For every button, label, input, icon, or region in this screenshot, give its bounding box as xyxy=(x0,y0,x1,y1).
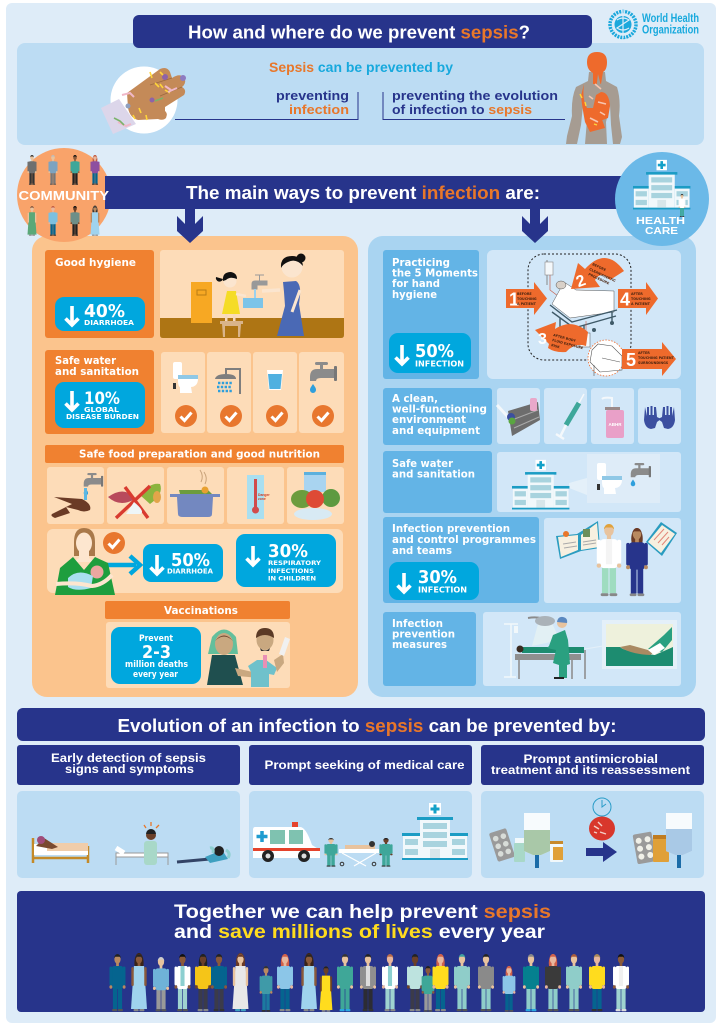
heading: safe food preparation xyxy=(45,445,344,463)
good hygiene box: 40% xyxy=(84,301,125,322)
arrow: moment 5: 5 xyxy=(626,350,636,370)
safe water and sanitation box: 10% xyxy=(84,389,120,409)
tile: gloves xyxy=(638,388,681,444)
icon: new pills and IV bag xyxy=(633,813,692,868)
panel: surgery xyxy=(483,612,681,686)
stat: 30% respiratory infections: RESPIRATORY xyxy=(268,559,321,567)
panel: how sepsis can be prevented xyxy=(17,43,704,145)
circle: health care: HEALTH xyxy=(636,215,685,227)
text: preventing the evolution of infection to sepsis: preventing the evolution xyxy=(392,88,558,103)
icon: collapsed person xyxy=(177,846,229,863)
icon: paramedics with stretcher xyxy=(324,838,393,867)
figure: row of people xyxy=(109,953,629,1012)
circle: health care xyxy=(615,152,709,246)
header: prompt antimicrobial: treatment and its reassessment xyxy=(491,763,690,777)
panel: health care xyxy=(368,236,696,697)
arrow: moment 3: 3 xyxy=(538,331,547,348)
box: infection prevention programmes: INFECTION xyxy=(418,586,467,594)
good hygiene box: Good hygiene xyxy=(55,256,136,269)
box: infection prevention programmes: and control programmes xyxy=(392,533,536,546)
header: prompt antimicrobial: Prompt antimicrobial xyxy=(524,752,658,766)
arrow: moment 5: SURROUNDINGS xyxy=(638,361,669,365)
scene: child washing hands with mother xyxy=(160,250,344,338)
text: together we can help: Together we can help prevent sepsis xyxy=(174,902,551,923)
heading: vaccinations xyxy=(105,601,290,619)
box: infection prevention measures: Infection xyxy=(392,617,443,630)
title bar xyxy=(133,15,592,48)
arrow: moment 3 xyxy=(535,322,588,352)
arrow: moment 1: BEFORE xyxy=(517,292,532,296)
arrow: down to community xyxy=(177,209,203,243)
box: infection prevention programmes xyxy=(383,517,539,603)
title bar: How and where do we prevent sepsis? xyxy=(188,22,530,42)
tile: shower xyxy=(207,352,251,433)
heading: sepsis can be prevented by: Sepsis can be prevented by xyxy=(269,60,454,75)
icon: hospital bed xyxy=(545,260,617,347)
box: clean environment: and equipment xyxy=(392,424,480,437)
header: early detection xyxy=(17,745,240,785)
arrow: moment 5: AFTER xyxy=(638,351,650,355)
arrow: moment 2: CLEAN/ASEPTIC xyxy=(589,267,617,283)
arrow: moment 4: A PATIENT xyxy=(631,302,651,306)
stat: prevent deaths: 2-3 xyxy=(142,642,171,663)
box: infection prevention measures xyxy=(383,612,476,686)
tile: thermometer xyxy=(227,467,284,524)
panel: vaccinations xyxy=(106,622,290,688)
panel: sepsis signs xyxy=(17,791,240,878)
arrow: moment 4: 4 xyxy=(620,290,630,310)
icon: patient in bed xyxy=(33,836,88,863)
tile: washing hands under tap xyxy=(47,467,104,524)
panel: breastfeeding xyxy=(47,528,343,595)
safe water and sanitation box: Safe water xyxy=(55,354,117,367)
good hygiene box: DIARRHOEA xyxy=(84,319,135,327)
tile: cooking pot xyxy=(167,467,224,524)
tile: syringe xyxy=(544,388,587,444)
panel: call to action xyxy=(17,891,705,1012)
icon: confused sitting patient xyxy=(116,822,168,865)
panel: community xyxy=(32,236,358,697)
WHO logo: World Health xyxy=(642,13,699,25)
box: clean environment: environment xyxy=(392,413,466,426)
stat: 30% respiratory infections xyxy=(236,534,336,587)
tile: thermometer: Danger xyxy=(258,493,270,497)
box: safe water and sanitation xyxy=(383,451,492,513)
safe water and sanitation box: and sanitation xyxy=(55,365,139,378)
banner: main ways to prevent infection xyxy=(105,176,630,209)
header: prompt seeking: Prompt seeking of medical care xyxy=(264,758,465,772)
safe water and sanitation box xyxy=(45,350,154,434)
panel: hospital with sanitation xyxy=(497,452,681,512)
circle: community xyxy=(17,148,111,242)
banner: evolution of infection to sepsis: Evolution of an infection to sepsis can be prevented by: xyxy=(118,715,616,736)
box: clean environment: A clean, xyxy=(392,392,438,405)
WHO logo xyxy=(610,10,699,38)
arrow: moment 1 xyxy=(506,282,547,315)
arrow: moment 4: TOUCHING xyxy=(631,297,651,301)
box: safe water and sanitation: and sanitation xyxy=(392,468,475,480)
box: 5 moments for hand hygiene: for hand xyxy=(392,277,440,290)
stat: 30% respiratory infections: 30% xyxy=(268,541,308,562)
box: infection prevention measures: prevention xyxy=(392,628,455,640)
circle: health care: CARE xyxy=(645,225,678,237)
tile: toilet xyxy=(161,352,205,433)
arrow: moment 4: AFTER xyxy=(631,292,643,296)
text: together we can help: and save millions of lives every year xyxy=(174,922,546,943)
stat: 50% diarrhoea: 50% xyxy=(171,550,210,571)
panel: infection control team xyxy=(544,518,681,603)
arrow: moment 2 xyxy=(571,258,624,291)
tile: glass of water xyxy=(253,352,297,433)
box: clean environment xyxy=(383,388,492,445)
arrow: down to health care xyxy=(522,209,548,243)
box: 5 moments for hand hygiene xyxy=(383,250,479,379)
tile: hand rub bottle xyxy=(591,388,634,444)
icon: patient surroundings xyxy=(588,340,624,376)
box: 5 moments for hand hygiene: the 5 Moments xyxy=(392,266,478,280)
safe water and sanitation box: GLOBAL xyxy=(84,406,120,414)
box: 5 moments for hand hygiene: hygiene xyxy=(392,288,437,301)
heading: vaccinations: Vaccinations xyxy=(164,605,238,617)
box: safe water and sanitation: Safe water xyxy=(392,457,454,470)
text: preventing the evolution of infection to sepsis: of infection to sepsis xyxy=(392,102,532,117)
arrow: moment 4 xyxy=(618,282,658,315)
box: infection prevention programmes: and teams xyxy=(392,544,452,557)
icon: hospital xyxy=(402,803,468,860)
box: 5 moments for hand hygiene: 50% xyxy=(415,341,454,362)
box: 5 moments for hand hygiene: INFECTION xyxy=(415,360,464,368)
tile: tap xyxy=(299,352,344,433)
text: preventing infection xyxy=(175,88,358,120)
safe water and sanitation box: DISEASE BURDEN xyxy=(66,413,139,421)
header: prompt seeking xyxy=(249,745,472,785)
stat: 50% diarrhoea: DIARRHOEA xyxy=(167,568,214,576)
box: infection prevention measures: measures xyxy=(392,638,447,651)
tile: raw food crossed out xyxy=(107,467,164,524)
tile: thermometer: zone xyxy=(258,497,266,501)
text: preventing the evolution of infection to sepsis xyxy=(383,88,565,120)
icon: ambulance xyxy=(253,822,320,862)
diagram: 5 moments xyxy=(487,250,681,379)
text: preventing infection: infection xyxy=(289,102,349,117)
stat: 50% diarrhoea xyxy=(143,544,223,582)
icon: contaminated hand xyxy=(101,66,186,134)
icon: pills and IV bag xyxy=(489,813,563,868)
box: 5 moments for hand hygiene: Practicing xyxy=(392,256,450,269)
stat: prevent deaths: million deaths xyxy=(125,660,188,670)
arrow: moment 1: A PATIENT xyxy=(517,302,537,306)
stat: 30% respiratory infections: IN CHILDREN xyxy=(268,574,316,582)
box: infection prevention programmes: 30% xyxy=(418,567,457,588)
stat: 30% respiratory infections: INFECTIONS xyxy=(268,567,314,575)
WHO logo: Organization xyxy=(642,24,699,36)
heading: safe food preparation: Safe food preparation and good nutrition xyxy=(79,448,320,460)
arrow: moment 2: PROCEDURE xyxy=(588,272,610,286)
arrow: moment 2: BEFORE xyxy=(592,262,607,272)
panel: medical care xyxy=(249,791,472,878)
arrow: moment 3: RISK xyxy=(551,343,561,349)
arrow: moment 2: 2 xyxy=(574,272,588,291)
box: clean environment: well-functioning xyxy=(392,402,487,416)
arrow: moment 1: 1 xyxy=(509,290,519,310)
box: infection prevention programmes: Infection prevention xyxy=(392,522,510,535)
arrow: moment 1: TOUCHING xyxy=(517,297,537,301)
panel: antimicrobial treatment xyxy=(481,791,704,878)
text: preventing infection: preventing xyxy=(276,88,349,103)
banner: evolution of infection to sepsis xyxy=(17,708,705,741)
label: community: COMMUNITY xyxy=(18,189,110,203)
figure: woman and health worker xyxy=(207,628,290,687)
tile: cleaning equipment xyxy=(497,388,540,444)
header: early detection: Early detection of sepsis xyxy=(51,751,206,765)
arrow: moment 5 xyxy=(622,342,676,376)
stat: prevent deaths: Prevent xyxy=(139,634,173,644)
stat: prevent deaths xyxy=(111,627,201,684)
stat: prevent deaths: every year xyxy=(133,670,179,680)
icon: clock and bacterium xyxy=(589,798,615,840)
arrow: moment 3: AFTER BODY xyxy=(553,333,577,343)
good hygiene box xyxy=(45,250,154,338)
header: prompt antimicrobial xyxy=(481,745,704,785)
tile: washed vegetables xyxy=(287,467,344,524)
arrow: moment 5: TOUCHING PATIENT xyxy=(638,356,675,360)
arrow: moment 3: FLUID EXPOSURE xyxy=(552,338,584,350)
banner: main ways to prevent infection: The main ways to prevent infection are: xyxy=(186,182,540,203)
header: early detection: signs and symptoms xyxy=(65,762,194,776)
tile: hand rub bottle: ABHR xyxy=(608,422,622,427)
arrow: treatment reassessment xyxy=(586,842,617,862)
icon: human body with organs xyxy=(566,52,622,144)
text: together we can help xyxy=(174,902,551,943)
